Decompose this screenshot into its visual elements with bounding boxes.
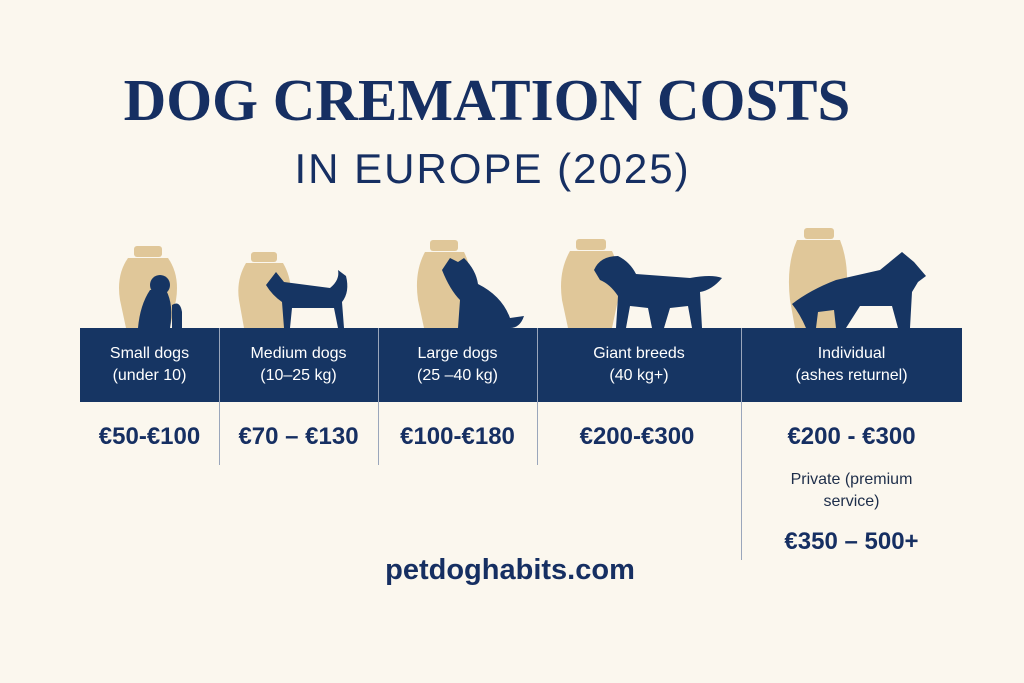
cell: small: Small dogs [110, 345, 189, 362]
price individual: €200 - €300 [787, 423, 916, 450]
dog 2 medium [266, 270, 347, 328]
cell: giant: Giant breeds [593, 345, 685, 362]
private label: Private (premium [791, 471, 912, 488]
cell: giant: (40 kg+) [609, 367, 669, 384]
band: categories [80, 328, 962, 402]
urn 2 [238, 252, 291, 328]
subtitle: IN EUROPE (2025) [294, 145, 691, 192]
urn 4 [561, 239, 619, 328]
footer url: petdoghabits.com [385, 554, 635, 586]
urn 5 [789, 228, 847, 328]
dog 4 giant [594, 256, 722, 328]
price private: €350 – 500+ [784, 528, 919, 555]
cell: medium: Medium dogs [250, 345, 347, 362]
cell: large: (25 –40 kg) [417, 367, 498, 384]
price giant: €200-€300 [580, 423, 694, 450]
cell: medium: (10–25 kg) [260, 367, 337, 384]
price large: €100-€180 [400, 423, 515, 450]
cell: medium [250, 345, 347, 384]
dog 5 individual [792, 252, 926, 328]
cell: individual [795, 345, 908, 384]
cell: large [417, 345, 498, 384]
title: DOG CREMATION COSTS [124, 67, 850, 133]
illustrations: urns and dogs [119, 228, 926, 328]
private label [791, 471, 912, 510]
cell: small: (under 10) [113, 367, 186, 384]
private label: service) [823, 493, 880, 510]
urn 1 [119, 246, 177, 328]
cell: small [110, 345, 189, 384]
price medium: €70 – €130 [238, 423, 359, 450]
dog 3 large [442, 258, 524, 328]
cell: large: Large dogs [417, 345, 498, 362]
price small: €50-€100 [99, 423, 200, 450]
cell: individual: Individual [818, 345, 885, 362]
dog 1 small [138, 275, 182, 328]
urn 3 [417, 240, 471, 328]
cell: giant [593, 345, 685, 384]
cell: individual: (ashes returnel) [795, 367, 908, 384]
